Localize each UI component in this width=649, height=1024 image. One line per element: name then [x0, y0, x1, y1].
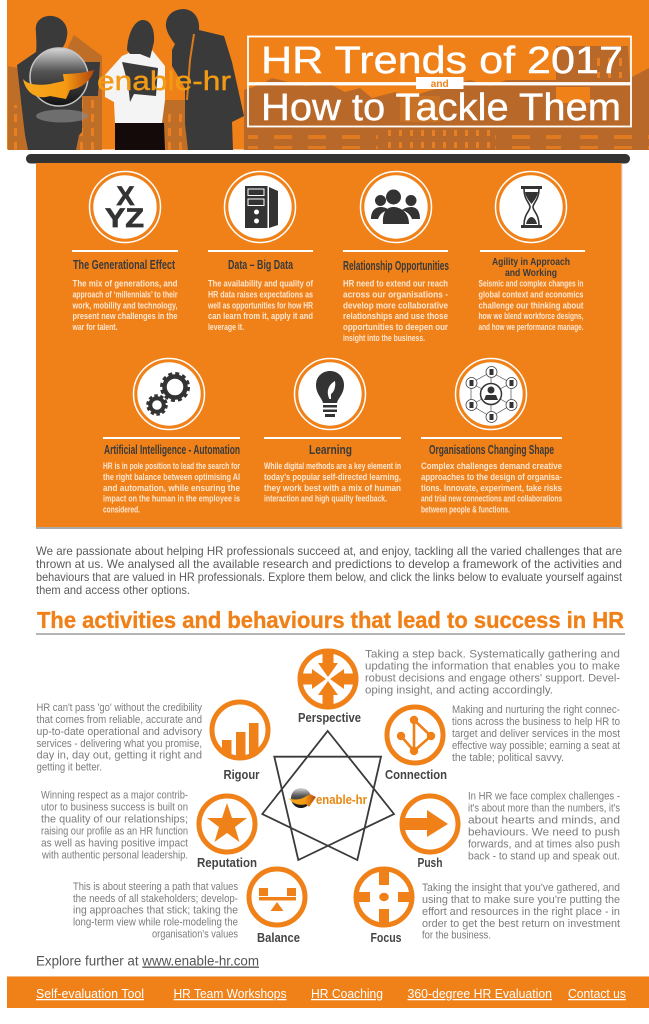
card: Learning: they work best with a mix of human — [264, 483, 401, 493]
behaviour: Perspective — [298, 648, 620, 725]
title box — [248, 36, 631, 129]
card: Data - Big Data: The availability and quality of — [208, 278, 314, 288]
card: The Generational Effect: The Generational Effect — [73, 258, 176, 272]
card: Organisations Changing Shape — [421, 358, 562, 514]
logo: enable-hr: enable-hr — [97, 66, 231, 96]
intro paragraph: behaviours that are valued in HR professionals. Explore them below, and click the links below to evaluate yourself against — [36, 571, 623, 584]
description: ing approaches that stick; taking the — [73, 904, 238, 916]
center logo: enable-hr — [316, 792, 367, 807]
behaviour: Reputation — [41, 790, 257, 870]
icon: crosshair — [356, 869, 412, 925]
title connector: and: and — [431, 79, 449, 90]
description — [468, 790, 620, 862]
card: Agility in Approach and Working: Agility in Approach — [492, 256, 570, 268]
description — [452, 704, 620, 764]
description: with authentic personal leadership. — [41, 850, 188, 862]
description — [41, 790, 188, 862]
card: Relationship Opportunities: develop more collaborative — [343, 300, 448, 310]
card: Organisations Changing Shape: and trial new connections and collaborations — [421, 494, 562, 504]
dark header bar — [26, 154, 630, 164]
icon: bar chart — [212, 702, 268, 762]
panel: HR trends — [36, 163, 623, 529]
label: Balance — [257, 930, 300, 945]
footer link bar — [7, 976, 649, 1008]
description: using that to make sure you're putting the — [422, 894, 620, 906]
description: In HR we face complex challenges - — [468, 790, 620, 802]
card: Agility in Approach and Working: and how we performance manage. — [478, 322, 584, 332]
card: Agility in Approach and Working: how we blend workforce designs, — [478, 311, 584, 321]
card: Artificial Intelligence - Automation — [103, 358, 240, 514]
icon: gears — [134, 358, 204, 430]
icon: computer tower — [224, 172, 296, 242]
description: up-to-date operational and advisory — [36, 726, 203, 738]
card: The Generational Effect: approach of ‘millennials’ to their — [72, 290, 178, 300]
businessman right silhouette — [166, 9, 244, 150]
card: Agility in Approach and Working: global context and economics — [478, 290, 584, 300]
icon: XYZ: YZ — [105, 203, 144, 233]
label: Connection — [385, 767, 447, 782]
icon: XYZ — [90, 172, 160, 242]
intro paragraph — [36, 545, 623, 597]
title connector: and — [416, 77, 464, 90]
label: Reputation — [197, 855, 257, 870]
icon: star — [199, 796, 255, 852]
card: Artificial Intelligence - Automation: the right balance between optimising AI — [103, 472, 240, 482]
card: The Generational Effect: present new challenges in the — [72, 311, 178, 321]
card: Artificial Intelligence - Automation: Artificial Intelligence - Automation — [104, 443, 240, 457]
card: Organisations Changing Shape: tions. Innovate, experiment, take risks — [421, 483, 562, 493]
description: day in, day out, getting it right and — [36, 750, 202, 762]
card: The Generational Effect: The mix of generations, and — [72, 278, 178, 288]
card: Organisations Changing Shape: Complex challenges demand creative — [421, 461, 562, 471]
description: tions across the business to help HR to — [452, 716, 620, 728]
icon: XYZ: X — [116, 181, 135, 211]
footer links: Self-evaluation Tool — [36, 987, 144, 1001]
description — [422, 882, 620, 942]
card: Data - Big Data: can learn from it, apply it and — [208, 311, 313, 321]
description: behaviours. We need to push — [468, 826, 620, 838]
card: Relationship Opportunities: relationships and use those — [343, 311, 448, 321]
description: the table; political savvy. — [452, 752, 564, 764]
card: Relationship Opportunities: Relationship Opportunities — [343, 259, 449, 273]
card: Learning: today's popular self-directed learning, — [264, 472, 401, 482]
card: Relationship Opportunities: insight into the business. — [343, 333, 425, 343]
card: The Generational Effect: work, mobility and technology, — [72, 300, 178, 310]
card: Data - Big Data: HR data raises expectations as — [208, 290, 313, 300]
card: The Generational Effect — [72, 172, 178, 332]
card: Relationship Opportunities: HR need to extend our reach — [343, 278, 448, 288]
icon: hourglass — [496, 172, 566, 242]
footer links: 360-degree HR Evaluation — [408, 987, 552, 1001]
description: oping insight, and acting accordingly. — [365, 684, 553, 696]
description: robust decisions and engage others' support. Devel- — [365, 672, 620, 684]
description — [365, 648, 620, 696]
card: Data - Big Data: Data – Big Data — [228, 258, 294, 272]
city skyline — [8, 35, 649, 150]
diagram: seven-point star — [262, 731, 394, 860]
description: HR can't pass 'go' without the credibility — [36, 702, 203, 714]
icon: connected nodes — [387, 707, 443, 763]
card: The Generational Effect: war for talent. — [72, 322, 118, 332]
label: Push — [418, 855, 443, 870]
icon: group of people — [360, 172, 432, 242]
description: This is about steering a path that values — [73, 881, 238, 893]
card: Organisations Changing Shape: approaches to the design of organisa- — [421, 472, 562, 482]
card: Learning — [264, 358, 401, 504]
behaviour: Rigour — [36, 702, 268, 782]
card: Artificial Intelligence - Automation: and automation, while ensuring the — [103, 483, 240, 493]
intro paragraph: We are passionate about helping HR professionals succeed at, and enjoy, tackling all the varied challenges that are — [36, 545, 622, 558]
description: target and deliver services in the most — [452, 728, 620, 740]
description: effective way possible; earning a seat at — [452, 740, 620, 752]
card: Organisations Changing Shape: between people & functions. — [421, 504, 510, 514]
footer links: HR Coaching — [311, 987, 383, 1001]
businessman left silhouette — [17, 16, 100, 150]
description: as well as having positive impact — [41, 838, 188, 850]
description: for the business. — [422, 930, 491, 942]
logo: enable-hr — [23, 48, 231, 122]
behaviour: Push — [402, 790, 620, 870]
description: about hearts and minds, and — [468, 814, 620, 826]
icon: inward arrows — [300, 651, 356, 707]
card: Learning: interaction and high quality feedback. — [264, 494, 387, 504]
icon: people network — [456, 358, 526, 430]
description: raising our profile as an HR function — [41, 826, 188, 838]
card: Relationship Opportunities: opportunities to deepen our — [343, 322, 448, 332]
description — [73, 881, 238, 940]
description: the needs of all stakeholders; develop- — [73, 893, 238, 905]
footer links: HR Team Workshops — [174, 987, 286, 1001]
description: Taking the insight that you've gathered, and — [422, 882, 620, 894]
description: order to get the best return on investment — [422, 918, 620, 930]
label: Perspective — [298, 710, 361, 725]
header banner — [7, 0, 649, 150]
description: long-term view while role-modeling the — [73, 916, 238, 928]
intro paragraph: thrown at us. We analysed all the available research and predictions to develop a framework of the activities and — [36, 558, 622, 571]
card: Artificial Intelligence - Automation: impact on the human in the employee is — [103, 494, 240, 504]
footer links: Contact us — [568, 987, 626, 1001]
card: Learning: Learning — [309, 443, 352, 457]
card: Data - Big Data: well as opportunities for how HR — [207, 300, 313, 310]
icon: balance scale — [249, 869, 305, 925]
card: Agility in Approach and Working — [478, 172, 585, 332]
description: the quality of our relationships; — [41, 814, 188, 826]
description: services - delivering what you promise, — [36, 738, 202, 750]
intro paragraph: them and access other options. — [36, 584, 190, 597]
description: utor to business success is built on — [41, 802, 188, 814]
heading: activities and behaviours: The activities and behaviours that lead to success in HR — [37, 607, 624, 633]
card: Organisations Changing Shape: Organisations Changing Shape — [429, 443, 554, 457]
behaviour: Focus — [356, 869, 620, 945]
description: back - to stand up and speak out. — [468, 850, 620, 862]
description: effort and resources in the right place - in — [422, 906, 620, 918]
card: Agility in Approach and Working: Seismic and complex changes in — [478, 278, 584, 288]
card: Relationship Opportunities: across our organisations - — [343, 290, 448, 300]
title line 1: HR Trends of 2017 — [261, 40, 623, 82]
explore link: Explore further at www.enable-hr.com — [36, 954, 259, 968]
description: that comes from reliable, accurate and — [36, 714, 202, 726]
card: Agility in Approach and Working: challenge our thinking about — [478, 300, 584, 310]
behaviour: Balance — [73, 869, 305, 945]
label: Rigour — [224, 767, 260, 782]
card: Data - Big Data — [207, 172, 314, 332]
label: Focus — [370, 930, 402, 945]
description: Making and nurturing the right connec- — [452, 704, 620, 716]
description — [36, 702, 203, 774]
card: Learning: While digital methods are a key element in — [264, 461, 401, 471]
card: Data - Big Data: leverage it. — [208, 322, 244, 332]
description: organisation's values — [152, 928, 238, 940]
description: Winning respect as a major contrib- — [41, 790, 188, 802]
description: updating the information that enables you to make — [365, 660, 620, 672]
description: forwards, and at times also push — [468, 838, 620, 850]
description: Taking a step back. Systematically gathering and — [365, 648, 620, 660]
card: Relationship Opportunities — [343, 172, 449, 343]
card: Agility in Approach and Working: and Working — [505, 267, 557, 279]
title line 2: How to Tackle Them — [261, 87, 621, 129]
card: Artificial Intelligence - Automation: HR is in pole position to lead the search for — [103, 461, 240, 471]
description: getting it better. — [36, 762, 102, 774]
icon: right arrow — [402, 796, 458, 852]
footer links — [36, 987, 626, 1001]
card: Artificial Intelligence - Automation: considered. — [103, 504, 140, 514]
businesswoman silhouette — [105, 20, 165, 150]
icon: light bulb — [294, 358, 366, 430]
description: it's about more than the numbers, it's — [468, 802, 620, 814]
behaviour: Connection — [385, 704, 620, 782]
